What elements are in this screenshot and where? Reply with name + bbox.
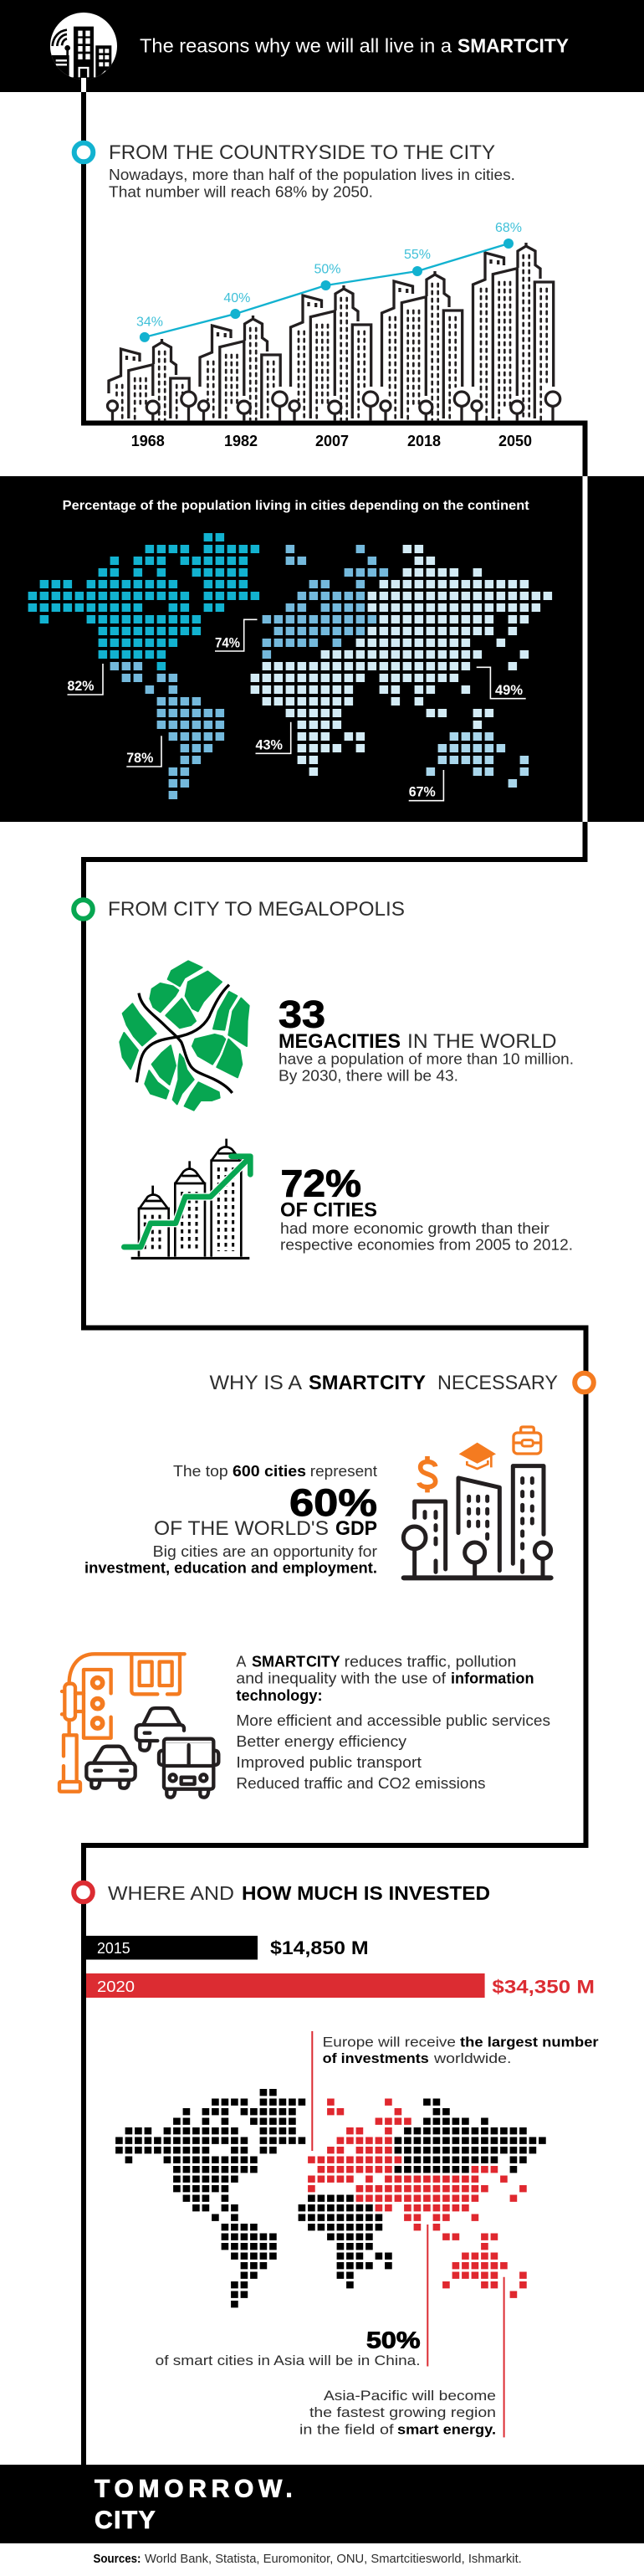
year labels <box>131 433 532 449</box>
bar: 2020 investment: 2020 <box>97 1978 135 1995</box>
skyline 1982 <box>199 316 287 421</box>
callout: Oceania 67% <box>409 770 443 801</box>
year labels: 1982 <box>224 433 258 449</box>
text block: 60% of GDP: 600 cities <box>233 1463 306 1480</box>
callout: Asia 49%: 49% <box>495 682 523 698</box>
chart: skyline growth by year <box>107 221 560 449</box>
panel: where and how much is invested <box>74 1882 599 2438</box>
year labels: 2007 <box>315 433 349 449</box>
intro text: Nowadays, more than half of the population lives in cities. <box>109 167 515 183</box>
text block: smart city benefits: SMART <box>252 1654 305 1670</box>
callout: Asia 49% <box>477 667 526 699</box>
text block: 60% of GDP: Big cities are an opportunity for <box>153 1543 377 1560</box>
North America dots <box>28 537 263 666</box>
text block: smart city benefits: More efficient and accessible public services <box>236 1712 550 1729</box>
stat: 33 megacities: IN THE WORLD <box>407 1030 557 1053</box>
callout: Europe investments <box>312 2031 599 2151</box>
icon: green city map <box>120 961 249 1111</box>
stat: 72% of cities: had more economic growth than their <box>280 1220 549 1237</box>
skyline 2050 <box>472 243 560 421</box>
year labels: 2050 <box>498 433 532 449</box>
footer logo text: CITY <box>95 2507 156 2534</box>
stat: 72% of cities: respective economies from 2005 to 2012. <box>280 1237 573 1254</box>
section marker: green ring <box>74 900 93 919</box>
footer band <box>0 2465 644 2543</box>
text block: smart city benefits: technology: <box>236 1687 323 1704</box>
header title: CITY <box>525 35 569 57</box>
stat: 33 megacities: 33 <box>279 993 325 1036</box>
dot map: world by continent <box>28 537 555 795</box>
text block: 60% of GDP: investment, education and employment. <box>84 1560 377 1577</box>
callout: Europe investments: worldwide. <box>433 2050 512 2066</box>
text block: smart city benefits <box>236 1654 550 1792</box>
text block: smart city benefits: information <box>451 1670 534 1687</box>
bar: 2020 investment <box>86 1973 595 1998</box>
stat: 33 megacities: By 2030, there will be 43. <box>279 1068 458 1085</box>
heading: CITY <box>380 1372 426 1394</box>
header title: The reasons why we will all live in a <box>140 35 452 57</box>
intro text: That number will reach 68% by 2050. <box>109 184 373 201</box>
Asia and Africa dots <box>251 549 555 772</box>
callout: Asia-Pacific smart energy: Asia-Pacific will become <box>324 2388 496 2404</box>
icon: city with money, education and work <box>403 1427 551 1578</box>
text block: 60% of GDP: The top <box>173 1463 228 1480</box>
callout: 50% China: of smart cities in Asia will be in China. <box>156 2353 420 2368</box>
text block: 60% of GDP: 60% <box>289 1481 377 1524</box>
percentage labels <box>136 221 522 330</box>
text block: 60% of GDP: represent <box>310 1463 377 1480</box>
skyline 1968 <box>107 339 196 421</box>
callout: South America 78% <box>126 736 161 767</box>
text block: smart city benefits: and inequality with the use of <box>236 1670 447 1687</box>
red dots <box>308 2102 529 2295</box>
bar: 2015 investment: 2015 <box>97 1940 130 1957</box>
callout: Europe investments: of investments <box>323 2050 429 2066</box>
callout: Asia-Pacific smart energy: the fastest growing region <box>309 2404 496 2420</box>
dot map: investment regions <box>115 2092 549 2304</box>
panel: from the countryside to the city <box>74 141 560 449</box>
text block: smart city benefits: CITY <box>306 1654 340 1670</box>
percentage labels: 55% <box>404 248 431 262</box>
callout: Europe 74% <box>215 619 258 651</box>
bar: 2015 investment: $14,850 M <box>270 1937 369 1958</box>
heading: HOW MUCH IS INVESTED <box>242 1882 490 1904</box>
section marker: blue ring <box>74 143 93 162</box>
stat: 33 megacities: have a population of more than 10 million. <box>279 1051 574 1068</box>
sources line: Sources: <box>94 2553 141 2566</box>
text block: smart city benefits: A <box>236 1654 246 1670</box>
stat: 72% of cities: 72% <box>281 1162 361 1204</box>
year labels: 1968 <box>131 433 165 449</box>
percentage labels: 34% <box>136 315 163 330</box>
callout: Africa 43%: 43% <box>256 737 283 753</box>
connecting timeline path <box>84 92 585 2469</box>
text block: smart city benefits: Improved public transport <box>236 1754 422 1771</box>
callout: Europe investments: Europe will receive <box>323 2034 456 2050</box>
callout: Europe 74%: 74% <box>215 635 240 651</box>
black dots <box>115 2092 549 2304</box>
text block: 60% of GDP: GDP <box>335 1517 377 1540</box>
callout: Africa 43% <box>256 722 291 753</box>
icon: traffic light and vehicles <box>59 1654 218 1798</box>
callout: North America 82%: 82% <box>67 678 94 694</box>
callout: 50% China: 50% <box>366 2327 421 2353</box>
callout: Asia-Pacific smart energy <box>299 2277 504 2438</box>
text block: 60% of GDP <box>84 1463 377 1577</box>
bar: 2015 investment <box>86 1936 369 1960</box>
growth line with points <box>140 239 514 342</box>
text block: 60% of GDP: OF THE WORLD'S <box>154 1517 329 1540</box>
callout: North America 82% <box>67 664 103 695</box>
text block: smart city benefits: Reduced traffic and CO2 emissions <box>236 1775 485 1792</box>
icon: buildings with rising arrow <box>124 1139 250 1258</box>
heading: NECESSARY <box>437 1372 558 1394</box>
text block: smart city benefits: Better energy efficiency <box>236 1733 406 1750</box>
callout: Europe investments: the largest number <box>460 2034 599 2050</box>
percentage labels: 40% <box>223 291 250 305</box>
skyline 2007 <box>289 285 378 421</box>
heading: WHERE AND <box>108 1882 234 1904</box>
panel: from city to megalopolis <box>74 898 574 1258</box>
percentage labels: 68% <box>495 221 522 235</box>
section marker: orange ring <box>575 1373 594 1392</box>
header band <box>0 0 644 94</box>
icon: smart city badge <box>50 13 117 92</box>
stat: 33 megacities: MEGACITIES <box>279 1030 401 1053</box>
panel: urban population by continent <box>0 476 644 822</box>
header title: SMART <box>457 35 525 57</box>
Oceania dots <box>427 736 532 783</box>
heading: FROM THE COUNTRYSIDE TO THE CITY <box>109 141 495 164</box>
intro text <box>109 167 515 201</box>
heading: FROM CITY TO MEGALOPOLIS <box>108 898 405 921</box>
skyline 2018 <box>381 271 469 421</box>
callout: Asia-Pacific smart energy: smart energy. <box>397 2422 496 2438</box>
callout: Asia-Pacific smart energy: in the field of <box>299 2422 394 2438</box>
callout: South America 78%: 78% <box>126 750 153 766</box>
panel: why is a smart city necessary <box>59 1372 594 1798</box>
footer logo text: TOMORROW. <box>95 2476 293 2502</box>
year labels: 2018 <box>407 433 441 449</box>
South America and Europe dots <box>110 549 391 795</box>
stat: 72% of cities <box>280 1162 573 1254</box>
stat: 33 megacities <box>279 993 574 1085</box>
bar: 2020 investment: $34,350 M <box>492 1977 595 1997</box>
heading: WHY IS A <box>209 1372 302 1394</box>
footer logo text <box>95 2476 293 2534</box>
sources line: World Bank, Statista, Euromonitor, ONU, Smartcitiesworld, Ishmarkit. <box>145 2553 522 2566</box>
callout: 50% China <box>156 2224 427 2368</box>
panel heading: Percentage of the population living in cities depending on the continent <box>63 499 529 513</box>
percentage labels: 50% <box>314 263 341 276</box>
heading: SMART <box>309 1372 379 1394</box>
section marker: red ring <box>74 1883 93 1901</box>
text block: smart city benefits: reduces traffic, pollution <box>345 1654 516 1670</box>
stat: 72% of cities: OF CITIES <box>280 1198 377 1222</box>
callout: Oceania 67%: 67% <box>409 784 436 800</box>
